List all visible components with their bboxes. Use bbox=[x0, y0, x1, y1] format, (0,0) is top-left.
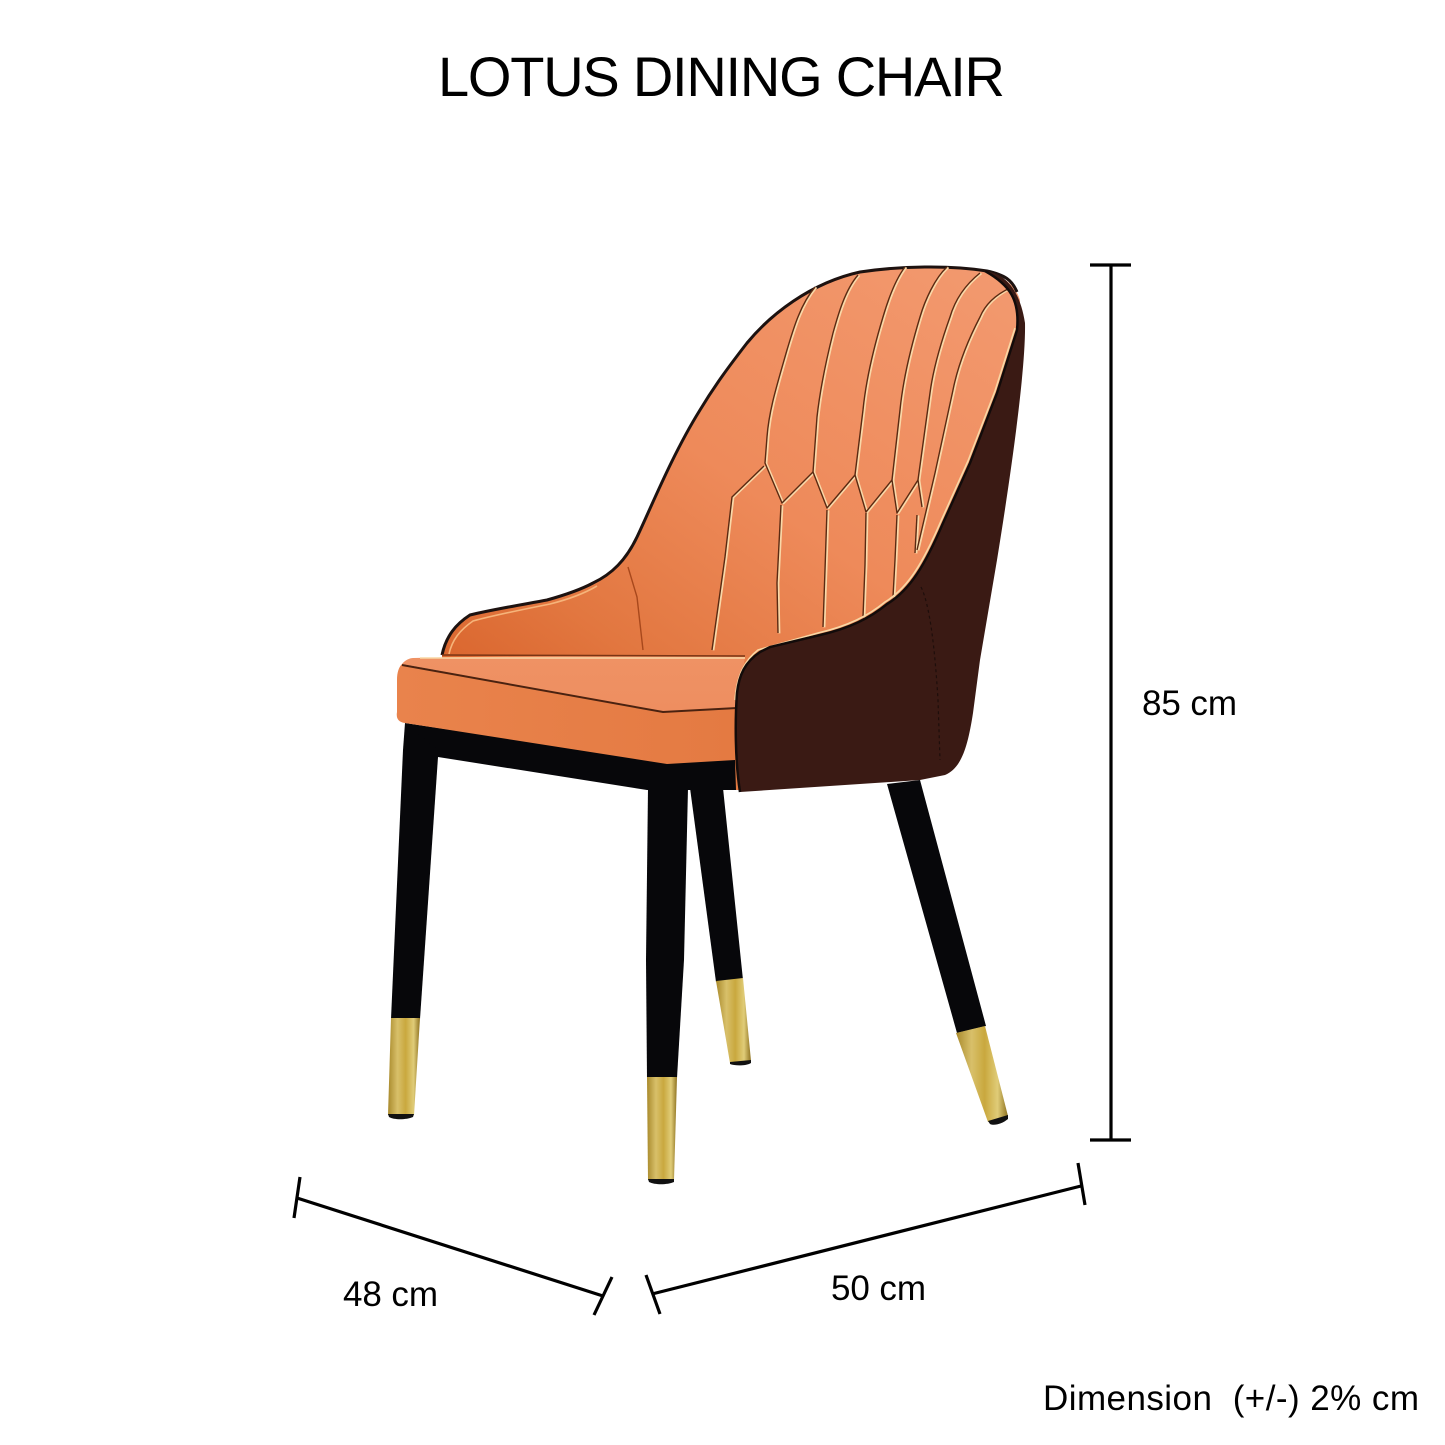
width dimension line bbox=[646, 1163, 1085, 1314]
back piping bbox=[442, 267, 1017, 655]
depth dimension line bbox=[294, 1177, 612, 1315]
front centre leg bbox=[646, 788, 688, 1184]
title: LOTUS DINING CHAIR bbox=[438, 45, 1005, 108]
seat piping bbox=[402, 665, 737, 712]
seat cushion bbox=[397, 655, 745, 790]
tolerance note: Dimension (+/-) 2% cm bbox=[1043, 1379, 1419, 1418]
height dimension line bbox=[1090, 265, 1131, 1140]
front left leg bbox=[388, 723, 438, 1119]
height label: 85 cm bbox=[1142, 684, 1237, 723]
shell stitching bbox=[921, 587, 940, 760]
width label: 50 cm bbox=[831, 1269, 926, 1308]
far right leg bbox=[887, 780, 1008, 1125]
chair product photo bbox=[388, 267, 1025, 1184]
piping highlight bbox=[449, 586, 597, 654]
shell piping bbox=[736, 271, 1018, 792]
depth label: 48 cm bbox=[343, 1275, 438, 1314]
seat back crease bbox=[442, 655, 745, 656]
upper channel seams bbox=[628, 267, 1011, 650]
seat front face bbox=[397, 664, 740, 790]
seat rear highlight bbox=[420, 657, 745, 659]
chair back inner upholstery bbox=[442, 267, 1020, 680]
back right leg bbox=[690, 788, 751, 1065]
shell cream edge bbox=[735, 328, 1015, 700]
seat top bbox=[402, 656, 745, 712]
brown outer shell bbox=[735, 271, 1025, 792]
seat frame rail bbox=[405, 723, 738, 790]
